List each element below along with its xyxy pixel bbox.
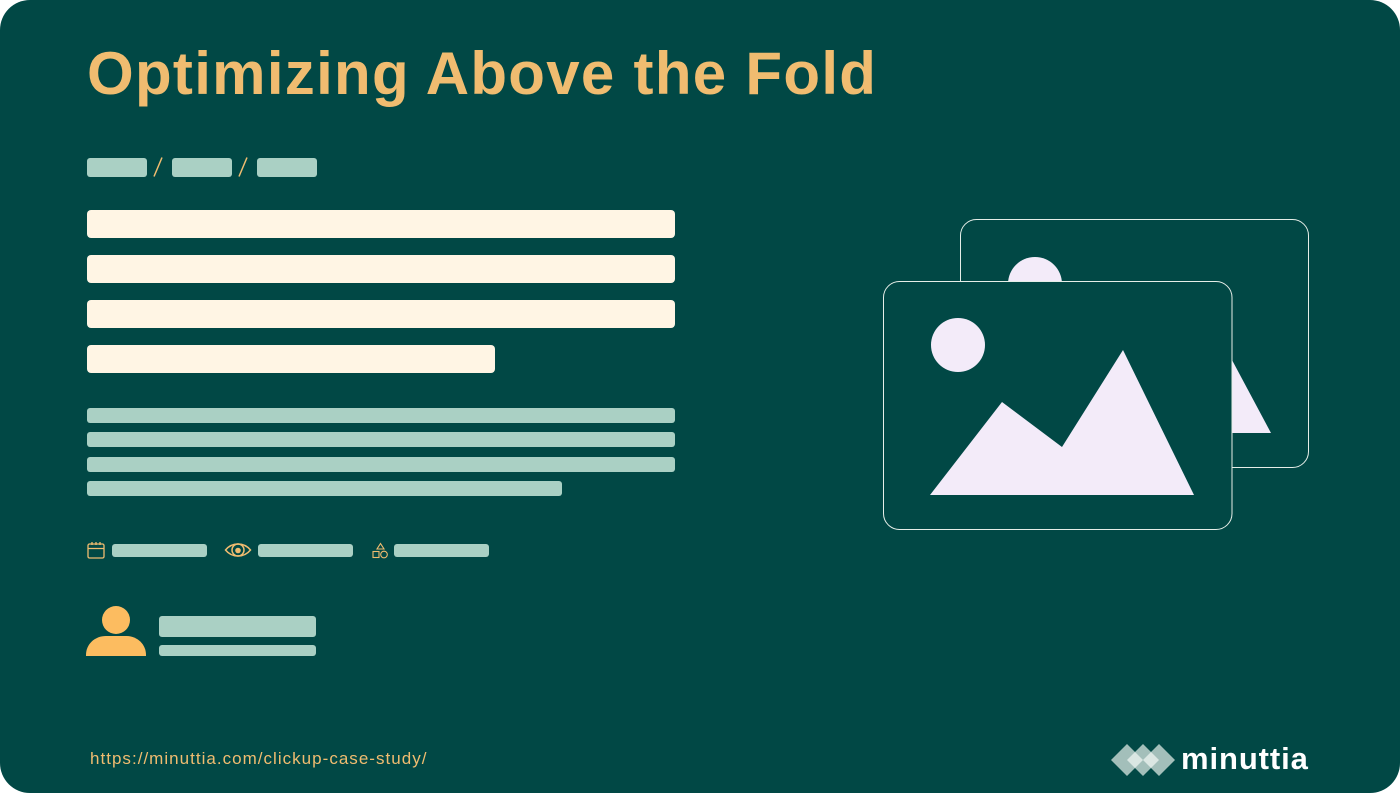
breadcrumb placeholder — [87, 157, 317, 177]
source url: https://minuttia.com/clickup-case-study/ — [90, 749, 427, 768]
image illustration — [883, 219, 1309, 530]
back image frame — [960, 220, 1308, 468]
headline placeholder — [87, 210, 675, 373]
icon: shapes — [372, 542, 388, 558]
logo — [1111, 741, 1309, 776]
body text placeholder — [87, 408, 675, 496]
logo wordmark: minuttia — [1181, 741, 1309, 776]
meta row — [87, 542, 489, 559]
icon: eye — [224, 543, 252, 557]
title: Optimizing Above the Fold — [87, 40, 877, 107]
icon: person — [86, 606, 146, 656]
author block — [86, 606, 316, 656]
front image frame — [884, 282, 1232, 530]
icon: calendar — [87, 542, 105, 559]
icon: logo diamonds — [1111, 744, 1175, 776]
